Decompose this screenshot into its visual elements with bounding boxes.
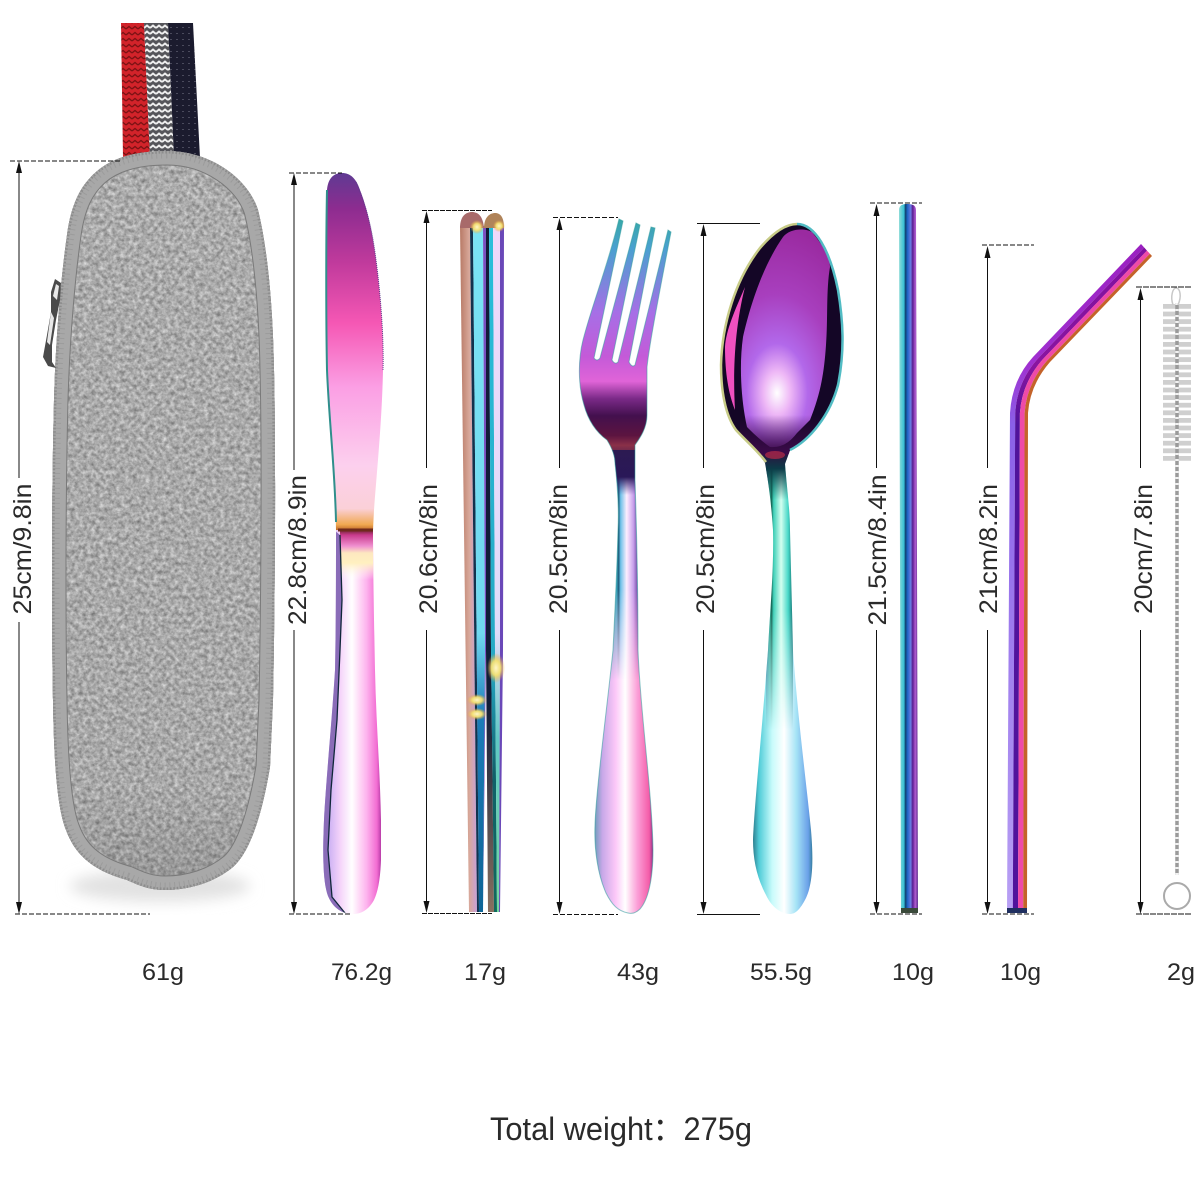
left chopstick: [460, 212, 486, 912]
item weights: 10g: [892, 959, 934, 986]
right chopstick: [484, 213, 505, 912]
spoon: [715, 220, 850, 920]
knife handle side strip: [323, 532, 344, 912]
zipper pull: [43, 279, 61, 368]
item weights: 43g: [617, 959, 659, 986]
dimension: brush 20cm/7.8in: [1130, 287, 1192, 914]
dimension: pouch 25cm/9.8in: [9, 161, 150, 914]
bent straw: [1007, 244, 1152, 913]
spoon rim: [721, 224, 843, 462]
knife: [323, 173, 384, 914]
dimension: straight straw 21.5cm/8.4in: [864, 203, 922, 914]
chopsticks: [460, 212, 505, 912]
dimension: spoon 20.5cm/8in: 20.5cm/8in: [692, 484, 720, 614]
item weights: 2g: [1167, 959, 1195, 986]
dimension: chopsticks 20.6cm/8in: 20.6cm/8in: [415, 484, 443, 614]
felt pouch: [45, 145, 280, 900]
pouch ground shadow: [70, 870, 250, 902]
fork: [578, 218, 672, 914]
dimension: chopsticks 20.6cm/8in: [415, 210, 492, 914]
spoon pink reflection: [725, 287, 745, 410]
dimension: pouch 25cm/9.8in: 25cm/9.8in: [9, 484, 37, 614]
dimension: fork 20.5cm/8in: [545, 218, 618, 914]
dimension: spoon 20.5cm/8in: [692, 224, 760, 914]
zipper band: [52, 151, 275, 890]
item weights: 76.2g: [331, 959, 392, 986]
item weights: [142, 959, 1195, 986]
dimension: straight straw 21.5cm/8.4in: 21.5cm/8.4in: [864, 474, 892, 626]
item weights: 55.5g: [750, 959, 812, 986]
item weights: 61g: [142, 959, 184, 986]
iridescent highlights: [467, 653, 505, 720]
dimension: knife 22.8cm/8.9in: [284, 173, 350, 914]
dimension: knife 22.8cm/8.9in: 22.8cm/8.9in: [284, 475, 312, 625]
knife collar line: [338, 528, 376, 532]
dimension: bent straw 21cm/8.2in: [975, 245, 1034, 914]
cleaning brush: [1163, 288, 1191, 909]
dimension: fork 20.5cm/8in: 20.5cm/8in: [545, 484, 573, 614]
item weights: 17g: [464, 959, 506, 986]
dimension: bent straw 21cm/8.2in: 21cm/8.2in: [975, 484, 1003, 614]
straight straw: [899, 204, 918, 913]
total weight: Total weight：275g: [490, 1111, 752, 1147]
dimension: brush 20cm/7.8in: 20cm/7.8in: [1130, 484, 1158, 614]
spoon bowl highlight: [741, 229, 830, 447]
item weights: 10g: [1000, 959, 1041, 986]
strap loop: red, grey and navy: [121, 23, 200, 158]
